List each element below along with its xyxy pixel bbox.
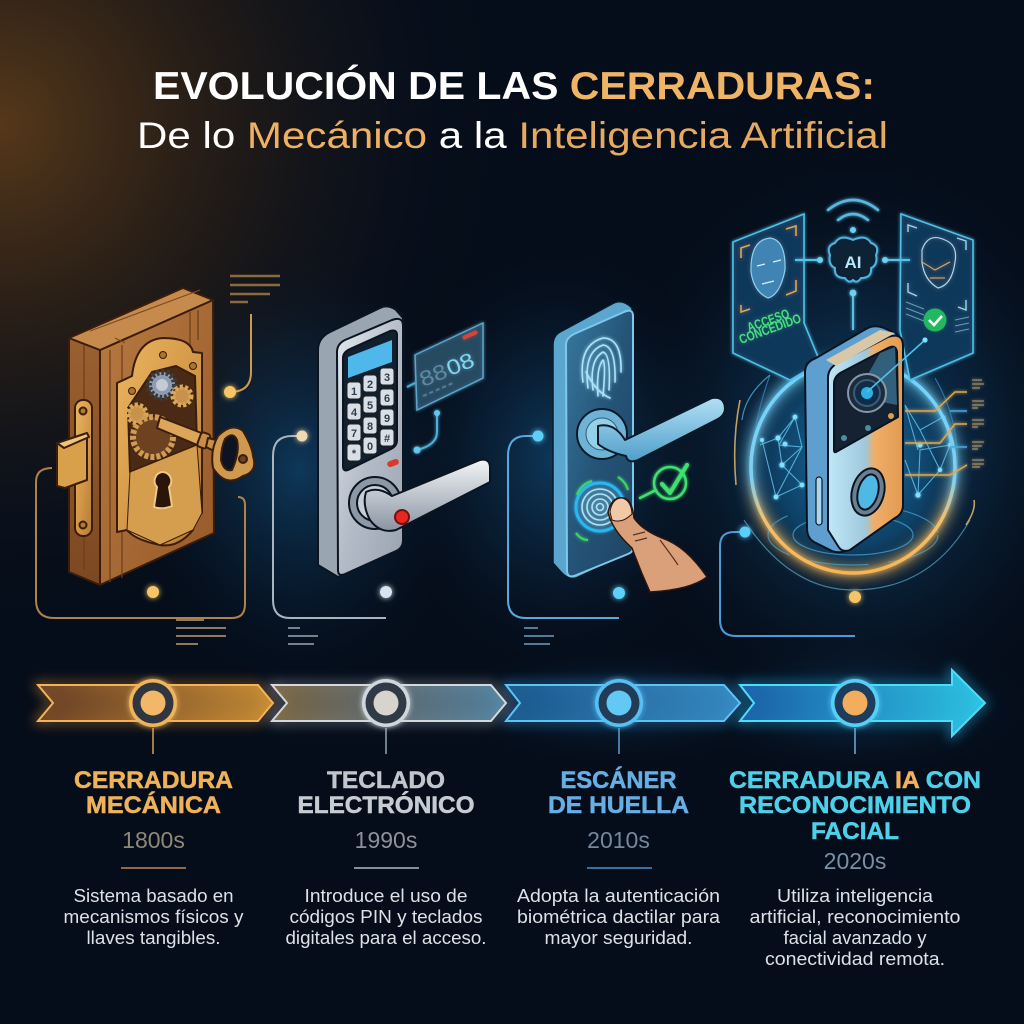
icon: left face recognition panel: CONCEDIDO <box>737 310 803 347</box>
key digits: 7 <box>351 428 357 440</box>
key digits: 9 <box>384 413 390 425</box>
icon: mechanical lock with key <box>57 288 254 585</box>
gears <box>128 372 191 457</box>
description <box>750 885 960 969</box>
timeline glow <box>38 670 985 736</box>
description <box>286 885 486 948</box>
heading: MECÁNICA <box>86 791 221 819</box>
segment 1 <box>38 685 273 721</box>
heading: CERRADURA <box>74 767 233 794</box>
column text: AI lock <box>729 767 981 969</box>
icon: electronic keypad lock <box>318 306 490 577</box>
segment 2 <box>272 685 506 721</box>
lens <box>848 374 886 412</box>
icon: connector dots of mechanical lock <box>147 386 236 598</box>
icon: left face recognition panel <box>733 214 820 380</box>
side slot <box>816 477 822 525</box>
heading: FACIAL <box>811 818 899 845</box>
handle <box>577 409 627 459</box>
year: 2010s <box>587 827 650 853</box>
connectors: electronic keypad <box>273 436 386 754</box>
heading <box>729 767 981 845</box>
icon: connector dots of AI lock <box>740 526 861 603</box>
description: digitales para el acceso. <box>286 927 486 948</box>
icon: wired data notes <box>905 380 984 475</box>
key digits: 8 <box>367 421 373 433</box>
key digits: 4 <box>351 407 358 419</box>
divider <box>354 867 419 869</box>
key digits: 5 <box>367 400 373 412</box>
button <box>846 465 890 519</box>
wooden box <box>69 288 214 585</box>
description: Sistema basado en <box>74 885 234 906</box>
fingerprint top <box>582 338 621 398</box>
description: conectividad remota. <box>765 948 945 969</box>
description: Adopta la autenticación <box>517 885 720 906</box>
segment 4 arrow <box>740 670 985 736</box>
year: 2020s <box>824 848 886 874</box>
glass body <box>553 302 632 578</box>
network lines <box>752 375 958 497</box>
title <box>137 64 888 156</box>
ground rings <box>744 505 970 590</box>
column text: electronic keypad <box>286 767 486 948</box>
icon: fingerprint scanner lock <box>553 302 725 592</box>
green check <box>640 465 687 499</box>
icon: digital display panel <box>407 323 483 454</box>
node 1 <box>129 679 177 727</box>
brass plate <box>117 338 202 545</box>
main ring <box>751 361 955 573</box>
lock body <box>318 306 403 577</box>
year: 1990s <box>355 827 417 853</box>
title line 1: EVOLUCIÓN DE LAS CERRADURAS: <box>153 64 875 108</box>
glowing center lines <box>175 702 980 704</box>
key digits <box>351 372 390 460</box>
description: mecanismos físicos y <box>64 906 244 927</box>
node 3 <box>595 679 643 727</box>
connectors: fingerprint scanner <box>508 436 619 754</box>
glow ring with network <box>735 361 974 590</box>
heading <box>548 766 689 819</box>
description: biométrica dactilar para <box>517 906 721 927</box>
connectors: mechanical lock <box>36 276 280 754</box>
key digits: 1 <box>351 386 357 398</box>
icon: connector dots of keypad <box>296 430 392 598</box>
title line 2: De lo Mecánico a la Inteligencia Artificial <box>137 115 888 156</box>
description: Introduce el uso de <box>304 885 468 906</box>
keys <box>347 368 394 461</box>
key digits: 0 <box>367 441 373 453</box>
fingerprint sensor <box>576 477 628 540</box>
key <box>157 417 254 480</box>
description: facial avanzado y <box>784 927 927 948</box>
camera panel <box>834 347 898 452</box>
timeline arrow <box>38 670 985 736</box>
icon: left face recognition panel: ACCESO <box>745 306 791 335</box>
key digits: 6 <box>384 393 390 405</box>
red button <box>395 510 409 524</box>
description: códigos PIN y teclados <box>290 906 482 927</box>
icon: right face scan panel <box>900 214 973 380</box>
gear window <box>128 366 197 472</box>
icon: AI brain with wifi <box>795 200 910 330</box>
heading: RECONOCIMIENTO <box>739 792 971 819</box>
description <box>64 885 244 948</box>
heading: DE HUELLA <box>548 792 689 819</box>
keypad face <box>343 330 397 470</box>
lower plate with keyhole <box>127 445 202 545</box>
heading: ELECTRÓNICO <box>298 791 474 819</box>
description <box>517 885 721 948</box>
node 4 <box>831 679 879 727</box>
hand <box>608 498 707 592</box>
column text: fingerprint scanner <box>517 766 721 948</box>
year: 1800s <box>122 827 185 853</box>
strike plate and bolt <box>57 400 92 536</box>
description: llaves tangibles. <box>86 927 220 948</box>
description: mayor seguridad. <box>544 927 692 948</box>
key digits: * <box>352 448 357 460</box>
icon: digital display panel: 08 <box>443 349 478 381</box>
icon: AI smart doorbell lock <box>805 326 928 552</box>
connectors: AI lock <box>720 532 855 754</box>
heading: CERRADURA IA CON <box>729 767 981 794</box>
icon: AI brain with wifi: AI <box>844 253 862 272</box>
heading <box>74 767 233 819</box>
body <box>805 326 903 552</box>
heading: ESCÁNER <box>560 766 676 794</box>
heading: TECLADO <box>327 767 445 794</box>
icon: digital display panel: 88 <box>416 360 451 392</box>
heading <box>298 767 474 819</box>
icon: connector dots of scanner <box>532 430 625 599</box>
description: artificial, reconocimiento <box>750 906 960 927</box>
node 2 <box>362 679 410 727</box>
key digits: 3 <box>384 372 390 384</box>
divider <box>587 867 652 869</box>
segment 3 <box>506 685 740 721</box>
key digits: 2 <box>367 379 373 391</box>
lcd screen <box>348 340 392 378</box>
handle <box>349 477 401 529</box>
key digits: # <box>384 433 390 445</box>
description: Utiliza inteligencia <box>777 885 934 906</box>
plate screws <box>128 352 196 530</box>
column text: mechanical lock <box>64 767 244 948</box>
divider <box>121 867 186 869</box>
